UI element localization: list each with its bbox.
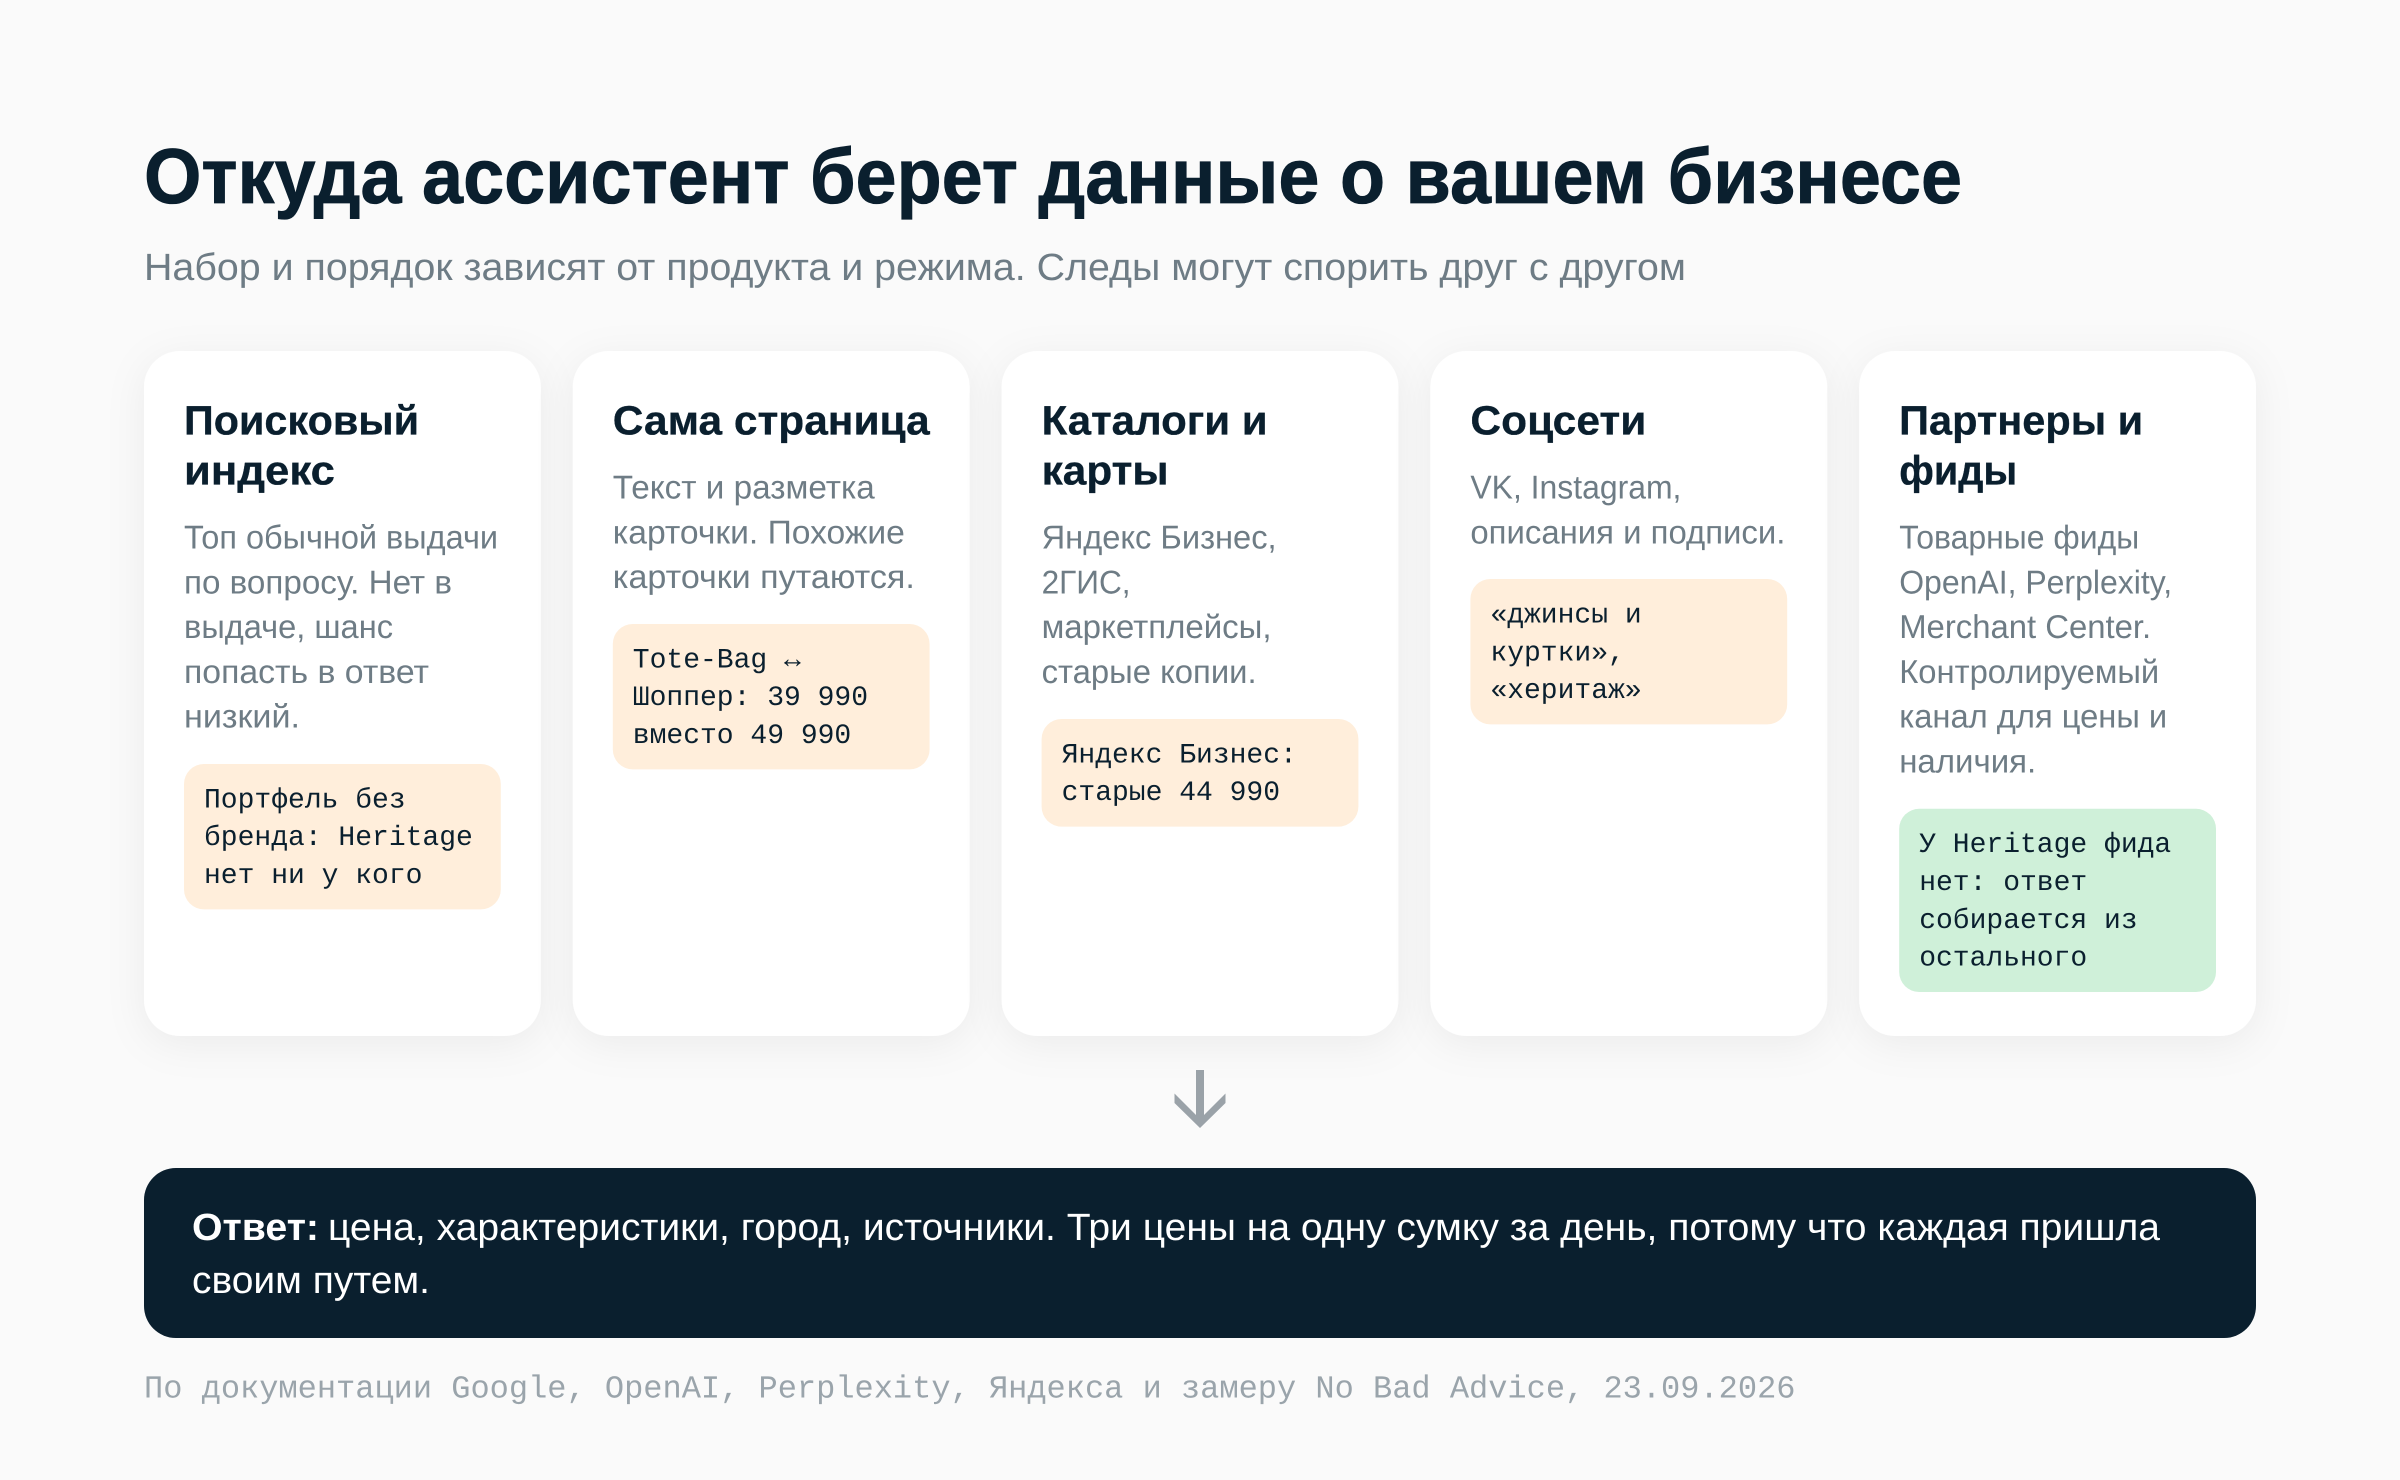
callout: search index note: нет ни у кого bbox=[204, 861, 422, 892]
text block: search index: по вопросу. Нет в bbox=[184, 563, 452, 600]
heading: the page itself: Сама страница bbox=[613, 398, 931, 444]
text block: catalogs and maps: маркетплейсы, bbox=[1042, 608, 1272, 645]
heading: catalogs and maps: Каталоги и bbox=[1042, 398, 1268, 444]
callout: social networks note: «джинсы и bbox=[1490, 601, 1642, 632]
callout: the page itself note bbox=[613, 624, 930, 769]
callout: catalogs and maps note: старые 44 990 bbox=[1062, 778, 1280, 809]
panel: the page itself bbox=[573, 351, 970, 1036]
text block: answer bbox=[192, 1207, 2161, 1302]
text block: search index: выдаче, шанс bbox=[184, 608, 393, 645]
text block: partners and feeds: Товарные фиды bbox=[1899, 518, 2139, 556]
text block: partners and feeds: OpenAI, Perplexity, bbox=[1899, 563, 2172, 600]
text block: catalogs and maps: Яндекс Бизнес, bbox=[1042, 518, 1277, 556]
text block: search index: низкий. bbox=[184, 698, 300, 735]
text block: search index: Топ обычной выдачи bbox=[184, 518, 498, 556]
text block: social networks bbox=[1470, 468, 1785, 550]
text block: answer: цена, характеристики, город, источники. Три цены на одну сумку за день, потому что каждая пришла bbox=[328, 1207, 2161, 1249]
panel: partners and feeds bbox=[1859, 351, 2256, 1036]
callout: catalogs and maps note: Яндекс Бизнес: bbox=[1062, 740, 1297, 771]
text block: the page itself: карточки. Похожие bbox=[613, 513, 905, 550]
text block: search index bbox=[184, 518, 498, 735]
heading: catalogs and maps: карты bbox=[1042, 448, 1169, 494]
title: Откуда ассистент берет данные о вашем бизнесе bbox=[144, 132, 1962, 220]
text block: catalogs and maps: 2ГИС, bbox=[1042, 563, 1131, 600]
text block: catalogs and maps: старые копии. bbox=[1042, 653, 1257, 690]
heading: social networks: Соцсети bbox=[1470, 398, 1646, 444]
callout: partners and feeds note: собирается из bbox=[1919, 906, 2138, 937]
text block: catalogs and maps bbox=[1042, 518, 1277, 690]
panel: catalogs and maps bbox=[1002, 351, 1398, 1036]
callout: search index note: Портфель без bbox=[204, 785, 406, 816]
callout: partners and feeds note: остального bbox=[1919, 944, 2087, 975]
text block: social networks: описания и подписи. bbox=[1470, 513, 1785, 550]
callout: partners and feeds note: У Heritage фида bbox=[1919, 830, 2171, 861]
heading: search index: индекс bbox=[184, 448, 335, 494]
heading: search index: Поисковый bbox=[184, 398, 419, 444]
panel: search index bbox=[144, 351, 541, 1036]
callout: social networks note: куртки», bbox=[1490, 638, 1625, 669]
callout: the page itself note: Tote-Bag ↔ bbox=[633, 645, 801, 676]
text block: the page itself: Текст и разметка bbox=[613, 468, 875, 506]
text block: answer: своим путем. bbox=[192, 1260, 430, 1302]
heading: search index bbox=[184, 398, 419, 494]
text block: answer: Ответ: bbox=[192, 1207, 319, 1249]
text block: partners and feeds: наличия. bbox=[1899, 742, 2036, 780]
callout: partners and feeds note: нет: ответ bbox=[1919, 868, 2087, 899]
text block: the page itself: карточки путаются. bbox=[613, 558, 915, 595]
text block: the page itself bbox=[613, 468, 915, 595]
callout: the page itself note: Шоппер: 39 990 bbox=[633, 683, 868, 714]
panel: social networks bbox=[1430, 351, 1827, 1036]
footer source note: По документации Google, OpenAI, Perplexity, Яндекса и замеру No Bad Advice, 23.09.2026 bbox=[144, 1370, 1795, 1407]
callout: social networks note bbox=[1470, 579, 1787, 724]
panel: answer bbox=[144, 1168, 2256, 1338]
callout: search index note bbox=[184, 764, 501, 909]
callout: catalogs and maps note bbox=[1042, 719, 1358, 827]
text block: partners and feeds: Контролируемый bbox=[1899, 653, 2159, 690]
heading: catalogs and maps bbox=[1042, 398, 1268, 494]
callout: search index note: бренда: Heritage bbox=[204, 823, 473, 854]
callout: social networks note: «херитаж» bbox=[1490, 676, 1642, 707]
arrow bbox=[1174, 1070, 1226, 1128]
heading: partners and feeds: Партнеры и bbox=[1899, 398, 2143, 444]
text block: partners and feeds: канал для цены и bbox=[1899, 698, 2167, 735]
heading: partners and feeds: фиды bbox=[1899, 448, 2017, 494]
callout: the page itself note: вместо 49 990 bbox=[633, 721, 851, 752]
text block: partners and feeds bbox=[1899, 518, 2172, 780]
text block: partners and feeds: Merchant Center. bbox=[1899, 608, 2151, 645]
heading: partners and feeds bbox=[1899, 398, 2143, 494]
text block: search index: попасть в ответ bbox=[184, 653, 429, 690]
callout: partners and feeds note bbox=[1899, 809, 2216, 992]
text block: social networks: VK, Instagram, bbox=[1470, 468, 1681, 506]
subtitle: Набор и порядок зависят от продукта и режима. Следы могут спорить друг с другом bbox=[144, 247, 1686, 289]
